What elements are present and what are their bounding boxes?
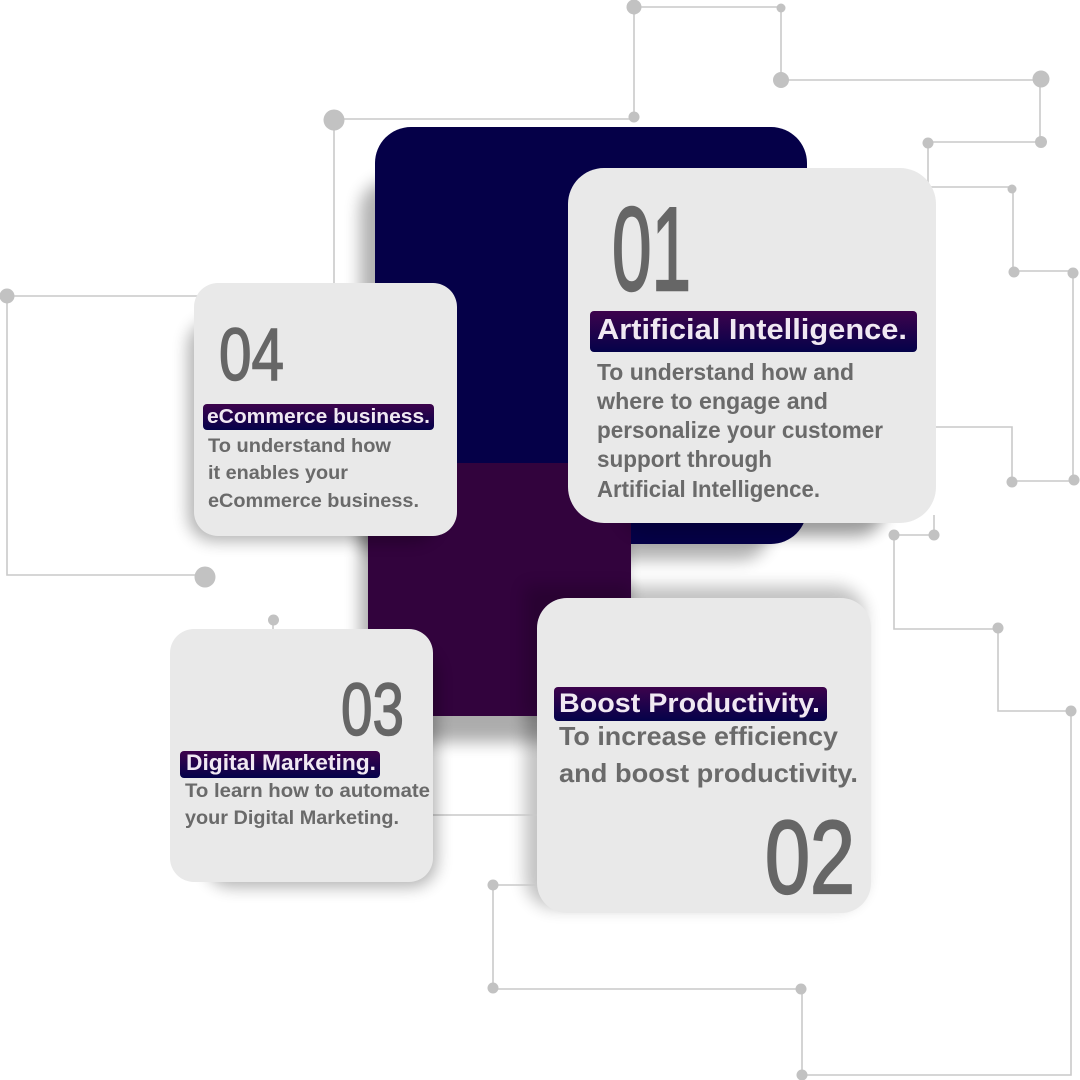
label bar [203, 404, 434, 430]
panel: card 04 eCommerce business [194, 283, 457, 536]
label text: Digital Marketing. [186, 750, 376, 775]
label text: eCommerce business. [207, 405, 430, 428]
body text: personalize your customer [597, 417, 883, 443]
shadow: card 04 [188, 320, 438, 541]
body text: your Digital Marketing. [185, 807, 399, 829]
body text: where to engage and [596, 388, 828, 414]
body text [596, 359, 883, 502]
circuit lines: connector stubs [268, 614, 540, 815]
body text: support through [597, 446, 772, 472]
number 01: 01 [612, 183, 691, 316]
shadow: navy panel [360, 180, 770, 560]
panel: purple square [368, 463, 631, 716]
body text: To increase efficiency [559, 721, 839, 751]
body text: To understand how and [597, 359, 854, 385]
body text: To learn how to automate [185, 780, 430, 802]
body text: it enables your [208, 462, 348, 484]
number 02: 02 [765, 800, 855, 916]
label text: Artificial Intelligence. [597, 314, 907, 346]
shadow: purple panel [360, 480, 625, 742]
body text: eCommerce business. [208, 490, 419, 512]
panel: navy square [375, 127, 807, 544]
circuit lines: bottom right network [488, 515, 1076, 1080]
body text [208, 435, 419, 512]
label bar [590, 311, 917, 352]
body text: Artificial Intelligence. [597, 476, 820, 502]
body text: To understand how [208, 435, 392, 457]
body text: and boost productivity. [559, 758, 858, 788]
body text [559, 721, 858, 788]
label bar [180, 751, 380, 778]
label text: Boost Productivity. [559, 688, 820, 718]
body text [185, 780, 430, 829]
panel: card 02 Boost Productivity [537, 598, 871, 916]
shadow: card 01 on panels [620, 400, 885, 535]
circuit lines: left network [0, 288, 216, 588]
circuit lines: top right network [324, 0, 1080, 488]
label bar [554, 687, 827, 721]
shadow: card 02 on panels [525, 586, 631, 716]
number 04: 04 [219, 313, 284, 396]
panel: card 01 Artificial Intelligence [568, 168, 936, 523]
shadow: card 03 [205, 650, 437, 887]
number 03: 03 [341, 668, 404, 751]
shadow: card 01 [620, 400, 885, 535]
shadow: card 02 [525, 586, 865, 908]
panel: card 03 Digital Marketing [170, 629, 433, 882]
